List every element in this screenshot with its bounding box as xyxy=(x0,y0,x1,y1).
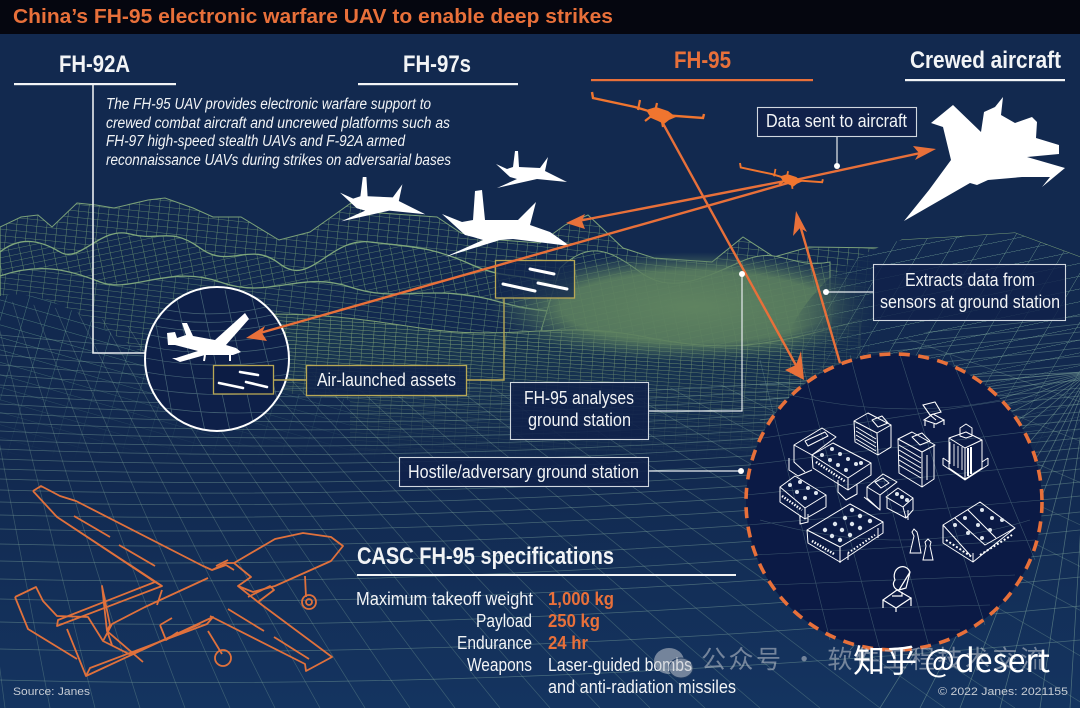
ground perspective grid xyxy=(0,302,1080,708)
specifications table: Weapons xyxy=(467,655,532,675)
title bar xyxy=(0,0,1080,34)
air-launched assets box: FH-92A xyxy=(214,366,274,394)
heading: Crewed aircraft: Crewed aircraft xyxy=(910,47,1061,74)
intro text block: crewed combat aircraft and uncrewed platforms such as xyxy=(106,115,450,132)
specifications table: Laser-guided bombs xyxy=(548,655,692,675)
icon: FH-97 aircraft small left xyxy=(340,177,425,221)
specifications table: 24 hr xyxy=(548,633,588,653)
label: FH-95 analyses: FH-95 analyses xyxy=(524,388,634,408)
intro text block: FH-97 high-speed stealth UAVs and F-92A armed xyxy=(106,133,406,150)
label: Air-launched assets: Air-launched assets xyxy=(317,370,456,390)
icon: radar top xyxy=(923,402,944,428)
source note: Source: Janes xyxy=(13,686,91,698)
line art: FH-95 drone outline xyxy=(15,486,343,676)
icon: FH-97 aircraft small right xyxy=(496,151,567,188)
arrow: ground station to FH-95 xyxy=(793,211,840,363)
icon: missiles on launchers xyxy=(910,529,933,560)
label: Data sent to aircraft: Data sent to aircraft xyxy=(766,111,907,131)
watermark: WeChat: 公众号 · 软件工程技术交流 xyxy=(701,640,1045,676)
label: Extracts data: Extracts data from xyxy=(905,270,1035,290)
specifications table: Payload xyxy=(476,611,532,631)
icon: FH-95 drone lower xyxy=(740,163,823,189)
connector: FH-92A to circle xyxy=(93,85,146,353)
heading: FH-92A: FH-92A xyxy=(59,51,130,78)
heading: FH-95: FH-95 xyxy=(674,47,731,74)
label: Air-launched assets xyxy=(306,366,466,396)
specifications table: 250 kg xyxy=(548,611,600,631)
connectors: air-launched assets xyxy=(274,298,504,380)
specifications table xyxy=(356,589,736,697)
mountain terrain mesh xyxy=(0,198,1080,470)
green valley xyxy=(490,252,900,362)
icon: FH-92A drone xyxy=(167,313,249,362)
label: FH-95 analyses xyxy=(510,271,745,440)
FH-92A circle inset xyxy=(144,286,290,432)
specifications table: and anti-radiation missiles xyxy=(548,677,736,697)
ground fade xyxy=(0,345,1080,708)
isometric buildings xyxy=(780,413,1015,563)
label: FH-95 analyses: ground station xyxy=(528,410,631,430)
specifications table: Maximum takeoff weight xyxy=(356,589,533,609)
left hill mesh xyxy=(0,294,350,470)
arrow: FH-95 to crewed aircraft xyxy=(795,146,936,180)
arrow: FH-95 to FH-97 xyxy=(566,181,785,229)
air-launched assets box: FH-97 xyxy=(496,260,574,298)
copyright note: © 2022 Janes: 2021155 xyxy=(938,686,1068,698)
icon: crewed aircraft xyxy=(904,97,1065,221)
icon: FH-97 aircraft large xyxy=(442,190,570,257)
intro text block: reconnaissance UAVs during strikes on adversarial bases xyxy=(106,152,451,169)
arrow: FH-95 to FH-92A xyxy=(246,183,788,341)
label: Hostile ground station xyxy=(400,458,744,486)
specifications table: Endurance xyxy=(457,633,532,653)
heading: FH-97s: FH-97s xyxy=(403,51,471,78)
label: Data sent to aircraft xyxy=(758,108,916,169)
arrow: FH-95 to ground station xyxy=(660,118,804,380)
intro text block: The FH-95 UAV provides electronic warfare support to xyxy=(106,96,431,113)
ground base tint xyxy=(0,460,1080,708)
title: China’s FH-95 electronic warfare UAV to enable deep strikes xyxy=(13,5,613,28)
roof vents xyxy=(788,447,1004,542)
label: Hostile ground station: Hostile/adversary ground station xyxy=(408,462,639,482)
icon: radar bottom xyxy=(883,567,911,612)
specifications heading: CASC FH-95 specifications xyxy=(357,543,614,570)
intro text block xyxy=(106,96,451,169)
watermark: Zhihu: 知乎 @desert xyxy=(853,636,1050,682)
specifications table: 1,000 kg xyxy=(548,589,614,609)
right hill mesh xyxy=(797,233,1080,452)
icon: FH-95 drone upper xyxy=(592,92,704,127)
hostile ground station circle xyxy=(746,354,1044,650)
label: Extracts data xyxy=(823,264,1066,320)
label: Extracts data: sensors at ground station xyxy=(880,292,1060,312)
